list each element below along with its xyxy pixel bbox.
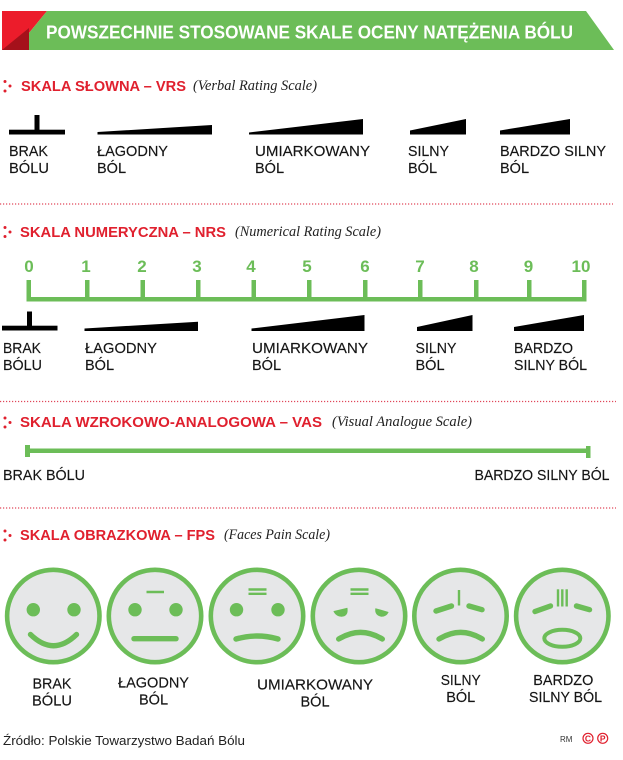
section: FPS heading: SKALA OBRAZKOWA – FPS <box>20 528 215 544</box>
credit marks: C <box>585 734 591 744</box>
face: very severe pain <box>516 570 608 662</box>
FPS labels: BARDZO <box>533 673 593 689</box>
NRS labels: BÓL <box>252 357 281 374</box>
NRS labels: BÓL <box>416 357 444 374</box>
NRS numeric axis <box>24 257 590 302</box>
NRS labels: BÓL <box>85 357 114 374</box>
VRS labels: BÓL <box>408 160 437 177</box>
section: VRS heading <box>4 78 317 95</box>
section: VAS heading: SKALA WZROKOWO-ANALOGOWA – VAS <box>20 415 322 431</box>
NRS labels: UMIARKOWANY <box>252 341 368 357</box>
NRS numeric axis: 4 <box>246 257 256 276</box>
VRS scale icons <box>9 115 570 134</box>
section: NRS heading: (Numerical Rating Scale) <box>235 224 381 240</box>
section: NRS heading <box>4 224 381 241</box>
face: severe pain <box>414 570 507 662</box>
VAS labels: BARDZO SILNY BÓL <box>474 467 610 484</box>
VAS line <box>25 445 590 458</box>
NRS numeric axis: 3 <box>192 257 202 276</box>
NRS numeric axis: 8 <box>469 257 479 276</box>
NRS numeric axis: 6 <box>360 257 370 276</box>
VAS labels <box>3 467 610 484</box>
VRS labels: SILNY <box>408 144 449 160</box>
NRS labels <box>3 341 587 374</box>
FPS labels: SILNY BÓL <box>529 689 602 706</box>
source note: Źródło: Polskie Towarzystwo Badań Bólu <box>3 733 245 748</box>
VRS labels: BÓLU <box>9 160 49 177</box>
credit marks <box>560 733 608 744</box>
NRS labels: SILNY <box>416 341 457 357</box>
NRS numeric axis: 2 <box>137 257 147 276</box>
NRS numeric axis: 0 <box>24 257 34 276</box>
FPS labels: BRAK <box>32 676 72 692</box>
FPS labels: ŁAGODNY <box>118 676 189 692</box>
VRS labels: UMIARKOWANY <box>255 144 370 160</box>
NRS numeric axis: 9 <box>524 257 533 276</box>
VRS labels: BÓL <box>500 160 529 177</box>
section: NRS heading: SKALA NUMERYCZNA – NRS <box>20 225 226 241</box>
VRS labels: BARDZO SILNY <box>500 144 606 160</box>
section: VRS heading: (Verbal Rating Scale) <box>193 78 317 94</box>
VRS labels: ŁAGODNY <box>97 144 168 160</box>
face: moderate pain <box>211 570 303 662</box>
face: no pain <box>7 570 100 662</box>
section: VRS heading: SKALA SŁOWNA – VRS <box>21 79 186 95</box>
NRS scale icons <box>2 312 584 331</box>
title banner <box>2 11 614 50</box>
credit marks: P <box>600 734 606 744</box>
title banner: POWSZECHNIE STOSOWANE SKALE OCENY NATĘŻENIA BÓLU <box>46 22 573 42</box>
credit marks: RM <box>560 735 573 744</box>
NRS numeric axis: 1 <box>81 257 91 276</box>
FPS labels: UMIARKOWANY <box>257 678 373 694</box>
VRS labels: BRAK <box>9 144 48 160</box>
NRS labels: BRAK <box>3 341 41 357</box>
FPS labels: BÓL <box>139 692 168 708</box>
face: mild pain <box>109 570 201 662</box>
face: moderate-severe pain <box>313 570 405 662</box>
section: VAS heading: (Visual Analogue Scale) <box>332 414 472 430</box>
NRS numeric axis: 7 <box>415 257 425 276</box>
NRS labels: ŁAGODNY <box>85 341 157 357</box>
VRS labels: BÓL <box>97 160 126 177</box>
FPS labels: BÓLU <box>32 692 72 710</box>
NRS labels: SILNY BÓL <box>514 357 587 374</box>
FPS labels: BÓL <box>446 689 475 706</box>
FPS labels: SILNY <box>441 673 481 689</box>
section: FPS heading <box>4 527 330 544</box>
NRS labels: BÓLU <box>3 357 42 374</box>
section: FPS heading: (Faces Pain Scale) <box>224 527 330 543</box>
FPS labels <box>32 673 602 710</box>
NRS numeric axis: 10 <box>572 257 590 276</box>
VAS labels: BRAK BÓLU <box>3 467 85 484</box>
NRS labels: BARDZO <box>514 341 573 357</box>
section: VAS heading <box>4 414 472 431</box>
VRS labels <box>9 144 606 177</box>
VRS labels: BÓL <box>255 160 284 177</box>
FPS labels: BÓL <box>300 694 330 710</box>
NRS numeric axis: 5 <box>302 257 312 276</box>
